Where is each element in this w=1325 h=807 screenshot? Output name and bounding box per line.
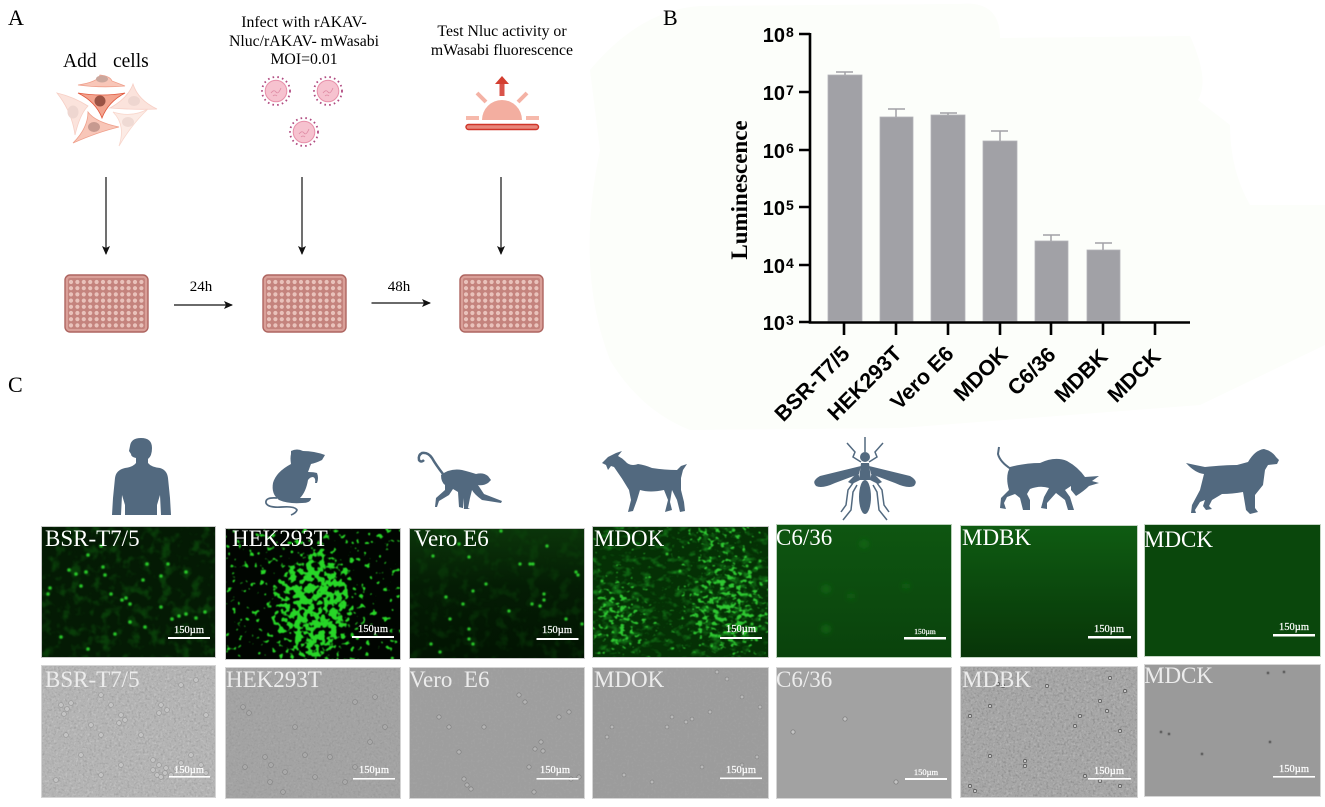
fluorescence: HEK293T: HEK293T (232, 526, 328, 551)
x tick labels: MDBK (1050, 344, 1113, 407)
arrow: signal to plate (500, 177, 502, 254)
brightfield: MDCK: MDCK (1144, 663, 1213, 688)
arrow: virus to plate (301, 177, 303, 254)
step label: test: mWasabi fluorescence (431, 42, 573, 59)
fluorescence: C6/36: C6/36 (776, 525, 832, 550)
x tick labels: MDOK (949, 342, 1013, 406)
fluorescence: MDOK: MDOK (594, 526, 665, 551)
icon: dog (1186, 449, 1279, 514)
icon: mosquito (814, 437, 916, 520)
icon: monkey (419, 453, 502, 509)
fluorescence: MDBK (960, 525, 1138, 658)
brightfield: MDBK (960, 666, 1138, 798)
brightfield: MDBK: 150µm (1094, 766, 1124, 777)
step label: add cells (63, 51, 149, 72)
brightfield: MDOK: MDOK (594, 667, 665, 692)
fluorescence: C6/36: 150µm (914, 627, 936, 636)
step label: infect: Nluc/rAKAV- mWasabi (229, 33, 380, 50)
x tick labels: BSR-T7/5 (770, 342, 855, 426)
y tick exponents (786, 24, 794, 328)
x tick labels: HEK293T (823, 342, 907, 425)
panel A: workflow (57, 14, 573, 332)
icon: cells (57, 75, 157, 146)
y tick exponents: 4 (786, 255, 794, 271)
brightfield: HEK293T: 150µm (359, 765, 389, 776)
brightfield: C6/36 (776, 667, 952, 799)
y tick labels: 10 (763, 256, 785, 278)
brightfield: C6/36: 150µm (914, 767, 939, 777)
y tick labels: 10 (763, 25, 785, 47)
step label: infect (229, 14, 380, 68)
y tick exponents: 3 (786, 312, 794, 328)
fluorescence: MDBK: 150µm (1094, 624, 1124, 635)
brightfield: BSR-T7/5: BSR-T7/5 (45, 667, 140, 692)
brightfield: Vero E6 (409, 667, 585, 799)
panel label: A: A (8, 5, 24, 30)
x tick labels: C6/36 (1003, 343, 1061, 400)
fluorescence: Vero E6: 150µm (542, 625, 572, 636)
step label: infect: MOI=0.01 (270, 51, 338, 68)
y tick labels: 10 (763, 198, 785, 220)
plate 2 (263, 275, 346, 332)
error bars (836, 72, 1112, 250)
icon: mouse (266, 450, 325, 515)
y tick labels: 10 (763, 83, 785, 105)
background wash (590, 4, 1325, 430)
panel label: C: C (8, 372, 23, 397)
fluorescence: MDCK: MDCK (1144, 527, 1213, 552)
brightfield: MDOK (592, 667, 769, 799)
step label: infect: Infect with rAKAV- (241, 14, 367, 31)
axes (799, 33, 1190, 335)
icon: human (112, 438, 171, 515)
brightfield: MDOK: 150µm (726, 765, 756, 776)
y tick exponents: 5 (786, 197, 794, 213)
step label: 48h: 48h (388, 279, 411, 295)
y tick exponents: 8 (786, 24, 794, 40)
y tick exponents: 6 (786, 140, 794, 156)
step label: test (431, 23, 573, 59)
icon: bull (998, 447, 1099, 510)
x tick labels: Vero E6 (886, 342, 959, 414)
brightfield: BSR-T7/5: 150µm (174, 765, 204, 776)
fluorescence: MDBK: MDBK (962, 525, 1031, 550)
brightfield: Vero E6: Vero E6 (409, 667, 489, 692)
fluorescence: MDOK: 150µm (726, 624, 756, 635)
step label: 24h: 24h (190, 279, 213, 295)
bars (828, 75, 1120, 321)
fluorescence: HEK293T (225, 526, 401, 660)
brightfield: Vero E6: 150µm (540, 765, 570, 776)
fluorescence: BSR-T7/5: BSR-T7/5 (45, 526, 140, 551)
fluorescence: MDCK: 150µm (1279, 622, 1309, 633)
brightfield: HEK293T (225, 667, 401, 799)
y tick labels (763, 25, 785, 335)
fluorescence: Vero E6: Vero E6 (414, 526, 489, 551)
icon: goat (602, 451, 687, 512)
x tick labels (770, 342, 1166, 426)
y tick exponents: 7 (786, 82, 794, 98)
panel B: bar chart (727, 24, 1190, 426)
brightfield: MDCK (1144, 663, 1321, 797)
brightfield: C6/36: C6/36 (776, 667, 832, 692)
step label: add cells: cells (113, 51, 149, 72)
brightfield: BSR-T7/5 (41, 665, 216, 798)
panel label: B: B (663, 5, 678, 30)
y tick labels: 10 (763, 313, 785, 335)
step label: add cells: Add (63, 51, 97, 72)
fluorescence: HEK293T: 150µm (358, 624, 388, 635)
plate 1 (65, 275, 148, 332)
icon: light signal (466, 76, 539, 130)
brightfield: MDCK: 150µm (1279, 764, 1309, 775)
step label: test: Test Nluc activity or (437, 23, 567, 40)
fluorescence: BSR-T7/5 (41, 526, 216, 658)
fluorescence: Vero E6 (409, 526, 585, 659)
fluorescence: MDOK (592, 526, 769, 658)
arrow: 24h (174, 304, 232, 306)
fluorescence: BSR-T7/5: 150µm (174, 625, 204, 636)
brightfield: HEK293T: HEK293T (226, 667, 322, 692)
fluorescence: C6/36 (776, 524, 952, 658)
arrow: cells to plate (105, 177, 107, 254)
arrow: 48h (372, 302, 430, 304)
x tick labels: MDCK (1103, 344, 1166, 407)
plate 3 (460, 275, 543, 332)
brightfield: MDBK: MDBK (962, 667, 1031, 692)
icon: virus particles (262, 77, 342, 146)
y axis title: Luminescence (727, 120, 752, 260)
fluorescence: MDCK (1144, 524, 1321, 657)
y tick labels: 10 (763, 141, 785, 163)
